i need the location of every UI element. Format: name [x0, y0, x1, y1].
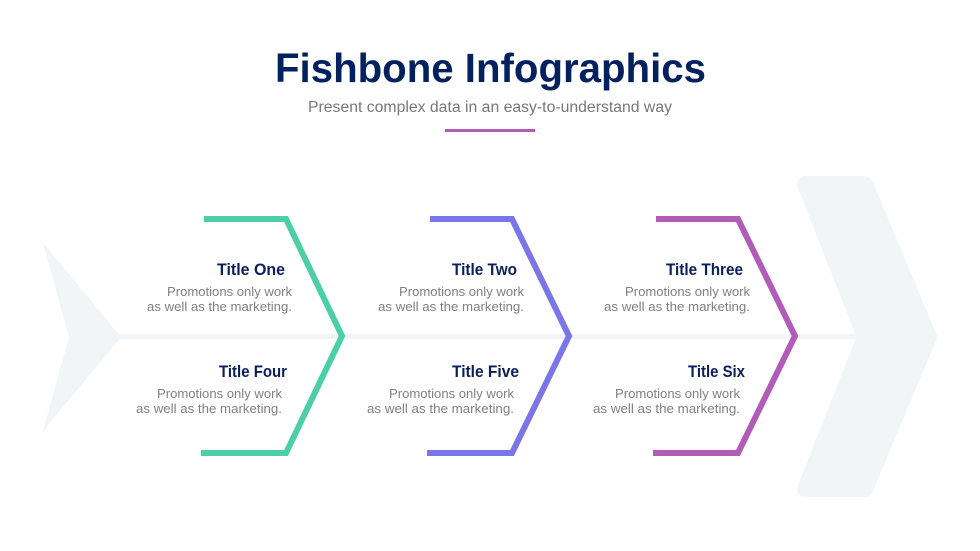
fish head arrow	[805, 184, 929, 489]
text block: title three: as well as the marketing.	[604, 299, 750, 314]
fish tail	[43, 243, 121, 431]
text block: title two: as well as the marketing.	[378, 299, 524, 314]
text block: title five: Title Five	[452, 363, 519, 381]
text block: title six	[593, 363, 746, 416]
text block: title one: Title One	[217, 261, 285, 279]
bone: green chevron	[201, 219, 342, 453]
text block: title six: Promotions only work	[615, 386, 740, 401]
text block: title six: as well as the marketing.	[593, 401, 740, 416]
text block: title six: Title Six	[688, 363, 746, 381]
title accent underline	[445, 129, 535, 132]
bone: blue chevron	[427, 219, 569, 453]
text block: title one	[147, 261, 292, 314]
text block: title two: Title Two	[452, 261, 517, 279]
title: Fishbone Infographics	[275, 45, 706, 91]
text block: title four: Title Four	[219, 363, 288, 381]
text block: title four: as well as the marketing.	[136, 401, 282, 416]
text block: title four: Promotions only work	[157, 386, 282, 401]
text block: title two: Promotions only work	[399, 284, 524, 299]
text block: title five: as well as the marketing.	[367, 401, 514, 416]
text block: title one: Promotions only work	[167, 284, 292, 299]
text block: title three: Title Three	[666, 261, 743, 279]
text block: title five	[367, 363, 519, 416]
subtitle: Present complex data in an easy-to-understand way	[308, 99, 672, 116]
text block: title one: as well as the marketing.	[147, 299, 292, 314]
text block: title two	[378, 261, 524, 314]
text block: title three: Promotions only work	[625, 284, 750, 299]
text block: title four	[136, 363, 288, 416]
text block: title five: Promotions only work	[389, 386, 514, 401]
text block: title three	[604, 261, 750, 314]
fish spine	[112, 334, 857, 339]
bone: purple chevron	[653, 219, 795, 453]
